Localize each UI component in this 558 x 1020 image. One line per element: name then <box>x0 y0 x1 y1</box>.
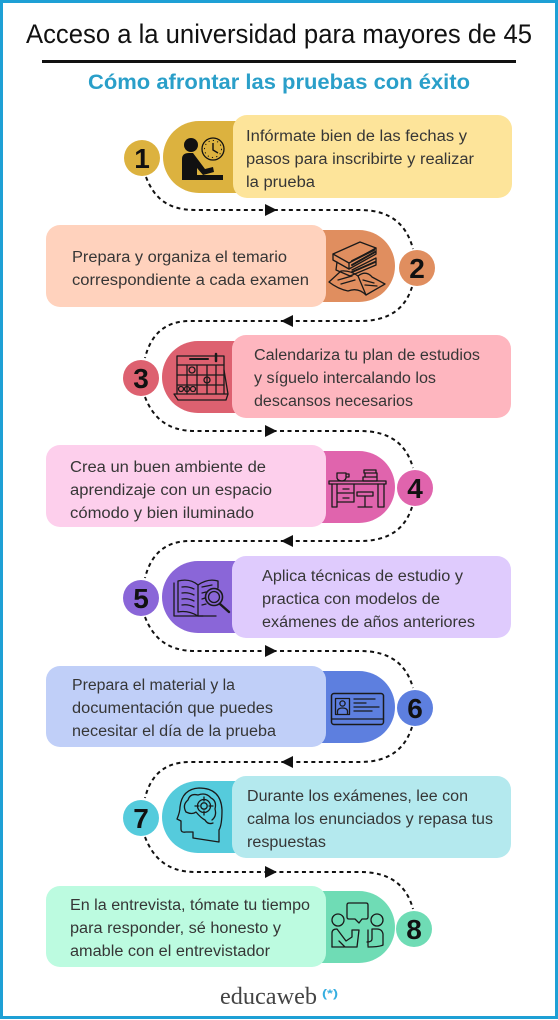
connector 1 to 2 <box>146 177 413 249</box>
text 4: aprendizaje con un espacio <box>70 482 272 499</box>
icon: calendar <box>174 354 228 400</box>
text 7: Durante los exámenes, lee con <box>247 788 468 805</box>
number badge 3 <box>123 360 159 396</box>
step 1 <box>124 115 512 198</box>
tab 4 <box>310 451 395 523</box>
text 4: cómodo y bien iluminado <box>70 505 254 522</box>
number badge 1 <box>124 140 160 176</box>
tab 2 <box>310 230 395 302</box>
text 8: En la entrevista, tómate tu tiempo <box>70 897 310 914</box>
card 6 <box>46 666 326 747</box>
text 6: documentación que puedes <box>72 700 273 717</box>
text 7: calma los enunciados y repasa tus <box>247 811 493 828</box>
card 1 <box>233 115 512 198</box>
text 1 <box>246 128 474 191</box>
connector 2 to 3 <box>145 287 412 358</box>
text 2 <box>72 249 309 289</box>
step 2 <box>46 225 435 307</box>
number badge 5 <box>123 580 159 616</box>
icon: books <box>329 242 385 295</box>
text 6 <box>72 677 276 740</box>
logo: educaweb: educaweb <box>220 984 317 1010</box>
number badge 6: 6 <box>407 693 423 724</box>
number badge 8 <box>396 911 432 947</box>
connector 7 to 8 <box>145 837 413 909</box>
icon: person writing with clock <box>182 138 224 180</box>
tab 7 <box>162 781 245 853</box>
step 8 <box>46 886 432 967</box>
number badge 3: 3 <box>133 363 149 394</box>
icon: head with brain and target <box>177 788 222 842</box>
text 1: Infórmate bien de las fechas y <box>246 128 467 145</box>
number badge 1: 1 <box>134 143 150 174</box>
step 7 <box>123 776 511 858</box>
tab 6 <box>310 671 395 743</box>
text 5: practica con modelos de <box>262 591 440 608</box>
text 1: pasos para inscribirte y realizar <box>246 151 474 168</box>
text 8: amable con el entrevistador <box>70 943 270 960</box>
text 4: Crea un buen ambiente de <box>70 459 266 476</box>
step 5 <box>123 556 511 638</box>
step 3 <box>123 335 511 418</box>
card 4 <box>46 445 326 527</box>
tab 1 <box>163 121 245 193</box>
text 4 <box>70 459 272 522</box>
card 2 <box>46 225 326 307</box>
text 6: Prepara el material y la <box>72 677 235 694</box>
connector 6 to 7 <box>145 727 412 798</box>
connector 5 to 6 <box>145 617 413 688</box>
number badge 4 <box>397 470 433 506</box>
text 1: la prueba <box>246 174 315 191</box>
text 2: Prepara y organiza el temario <box>72 249 287 266</box>
card 5 <box>232 556 511 638</box>
tab 8 <box>310 891 395 963</box>
card 8 <box>46 886 326 967</box>
icon: id card <box>332 694 384 724</box>
card 3 <box>232 335 511 418</box>
text 8 <box>70 897 310 960</box>
icon: open book and magnifier <box>174 580 229 616</box>
card 7 <box>232 776 511 858</box>
text 3: y síguelo intercalando los <box>254 370 436 387</box>
text 3: descansos necesarios <box>254 393 413 410</box>
text 8: para responder, sé honesto y <box>70 920 281 937</box>
text 7 <box>247 788 493 851</box>
text 2: correspondiente a cada examen <box>72 272 309 289</box>
number badge 8: 8 <box>406 914 422 945</box>
text 3 <box>254 347 480 410</box>
text 5: exámenes de años anteriores <box>262 614 475 631</box>
text 5 <box>262 568 475 631</box>
step 4 <box>46 445 433 527</box>
subtitle: Cómo afrontar las pruebas con éxito <box>88 71 470 94</box>
text 6: necesitar el día de la prueba <box>72 723 276 740</box>
icon: interview <box>332 903 383 947</box>
tab 5 <box>162 561 245 633</box>
tab 3 <box>162 341 245 413</box>
connector 3 to 4 <box>145 397 413 468</box>
text 5: Aplica técnicas de estudio y <box>262 568 463 585</box>
step 6 <box>46 666 433 747</box>
number badge 4: 4 <box>407 473 423 504</box>
title: Acceso a la universidad para mayores de 45 <box>26 19 532 49</box>
number badge 6 <box>397 690 433 726</box>
number badge 2 <box>399 250 435 286</box>
number badge 5: 5 <box>133 583 149 614</box>
text 7: respuestas <box>247 834 326 851</box>
number badge 7 <box>123 800 159 836</box>
number badge 2: 2 <box>409 253 425 284</box>
icon: desk <box>329 470 386 507</box>
number badge 7: 7 <box>133 803 149 834</box>
logo: educaweb: (*) <box>322 988 338 1000</box>
connector 4 to 5 <box>145 507 412 578</box>
text 3: Calendariza tu plan de estudios <box>254 347 480 364</box>
